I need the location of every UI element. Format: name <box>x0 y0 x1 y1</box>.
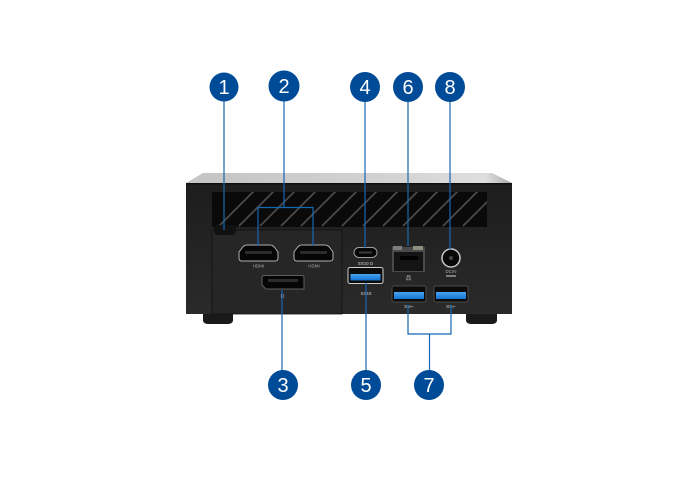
USB-C port <box>354 248 377 266</box>
HDMI port 1: HDMI <box>253 264 264 268</box>
top surface <box>186 173 512 183</box>
mini PC body <box>186 173 512 324</box>
HDMI port 2 <box>294 245 333 268</box>
rubber foot left <box>203 313 233 324</box>
callout 8: DC jack: 8 <box>444 77 456 99</box>
USB-A port left <box>392 286 426 309</box>
callout 7: USB-A pair <box>408 305 451 400</box>
DC power jack: DCIN <box>446 269 456 274</box>
callout 3: DisplayPort: 3 <box>277 375 289 397</box>
USB-C port: SS10 D <box>358 261 374 266</box>
callout 5: USB-A front: 5 <box>360 375 372 397</box>
callout 2: HDMI ports <box>258 70 313 246</box>
USB-A port right: SS⇠ <box>446 304 456 309</box>
callout 1: power button: 1 <box>218 77 230 99</box>
callout 8: DC jack <box>435 72 465 250</box>
I/O panel left <box>212 230 342 314</box>
USB-A port front: SS10 <box>360 291 372 296</box>
callout 3: DisplayPort <box>268 290 298 400</box>
callout 7: USB-A pair: 7 <box>423 375 435 397</box>
HDMI port 2: HDMI <box>308 264 320 268</box>
callout 5: USB-A front <box>351 283 381 400</box>
HDMI port 1 <box>239 245 278 268</box>
DC power jack <box>442 249 460 277</box>
rubber foot right <box>466 313 497 324</box>
power button <box>214 225 236 235</box>
callout 6: ethernet: 6 <box>402 77 414 99</box>
front face <box>186 183 512 314</box>
USB-A port front <box>348 268 383 296</box>
USB-A port right <box>434 286 468 309</box>
callout 2: HDMI ports: 2 <box>278 76 290 98</box>
callout 6: ethernet <box>393 72 423 246</box>
ethernet port: 品 <box>405 275 412 282</box>
DisplayPort port <box>262 276 304 300</box>
vent <box>212 190 499 227</box>
USB-A port left: SS⇠ <box>404 304 414 309</box>
ethernet port <box>392 246 425 282</box>
DisplayPort port: D <box>281 294 285 300</box>
callout 4: USB-C: 4 <box>359 77 371 99</box>
callout 1: power button <box>210 72 238 230</box>
callout 4: USB-C <box>350 72 380 248</box>
